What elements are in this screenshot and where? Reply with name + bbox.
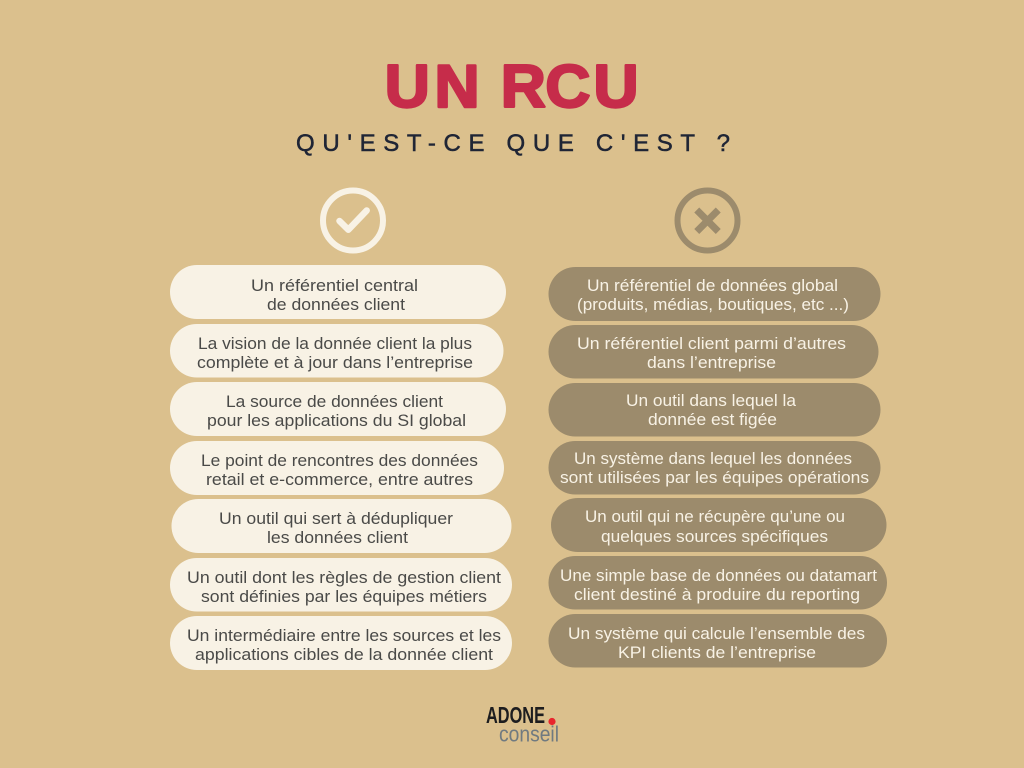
item: KPI computation: KPI clients de l’entreprise [618,643,816,662]
item: one client reference among others: dans l’entreprise [647,353,776,372]
item: simple database: Une simple base de données ou datamart [560,566,877,585]
item: global data reference [548,267,880,321]
item: frozen data tool: Un outil dans lequel la [626,391,797,410]
item: simple database: client destiné à produire du reporting [574,585,860,604]
item: central reference: de données client [267,295,405,314]
item: data source: La source de données client [226,392,443,411]
logo: Adone Conseil: ADONE [486,702,545,728]
item: simple database [548,556,887,610]
item: data source [170,382,506,436]
subtitle: QU'EST-CE QUE C'EST ? [296,130,730,157]
item: data source: pour les applications du SI global [207,411,466,430]
item: business rules: sont définies par les équipes métiers [201,587,487,606]
item: frozen data tool: donnée est figée [648,410,777,429]
item: intermediary [170,616,512,670]
item: deduplication: Un outil qui sert à dédupliquer [219,509,453,528]
item: specific sources only: Un outil qui ne récupère qu’une ou [585,507,845,526]
item: deduplication: les données client [267,528,408,547]
item: meeting point [170,441,504,495]
item: one client reference among others [548,325,878,378]
item: KPI computation: Un système qui calcule l’ensemble des [568,624,865,643]
item: central reference [170,265,506,319]
item: operations teams: sont utilisées par les équipes opérations [560,468,869,487]
item: operations teams: Un système dans lequel les données [574,449,852,468]
item: intermediary: Un intermédiaire entre les sources et les [187,626,501,645]
logo: Adone Conseil [486,702,559,746]
item: most complete vision: La vision de la donnée client la plus [198,334,472,353]
item: most complete vision [170,324,504,378]
item: deduplication [172,499,512,553]
panel: what an RCU is not [548,267,887,668]
item: one client reference among others: Un référentiel client parmi d’autres [577,334,846,353]
title: UN RCU [0,53,639,120]
item: frozen data tool [548,383,880,436]
item: operations teams [548,441,880,494]
item: business rules [170,558,512,612]
item: intermediary: applications cibles de la donnée client [195,645,493,664]
icon: cross in circle [678,190,738,250]
item: meeting point: retail et e-commerce, entre autres [206,470,473,489]
icon: check mark in circle [323,190,383,250]
item: specific sources only [551,498,886,552]
item: business rules: Un outil dont les règles de gestion client [187,568,501,587]
item: most complete vision: complète et à jour dans l’entreprise [197,353,473,372]
item: central reference: Un référentiel central [251,276,418,295]
logo: Adone Conseil: conseil [499,722,559,746]
item: global data reference: Un référentiel de données global [587,276,838,295]
item: global data reference: (produits, médias, boutiques, etc ...) [577,295,849,314]
item: specific sources only: quelques sources spécifiques [601,527,828,546]
item: KPI computation [548,614,887,668]
panel: what an RCU is [170,265,512,670]
item: meeting point: Le point de rencontres des données [201,451,478,470]
